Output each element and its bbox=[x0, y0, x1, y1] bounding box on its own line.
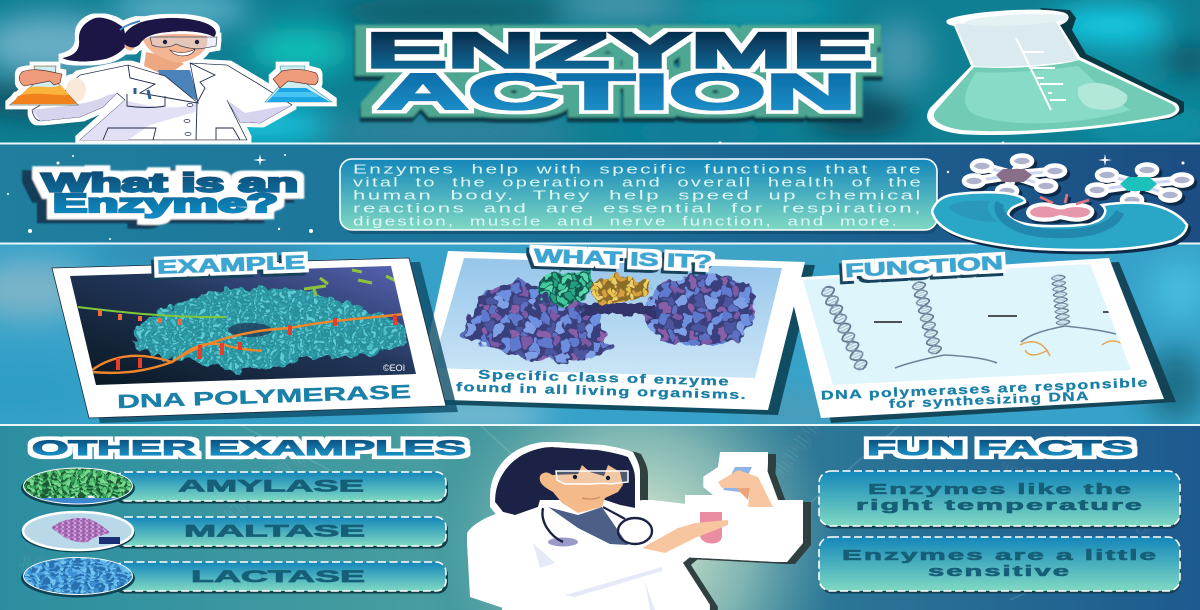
card three shadow bbox=[797, 262, 1176, 423]
panel: example card bbox=[52, 258, 458, 423]
example row: amylase: AMYLASE bbox=[178, 476, 364, 496]
hair bbox=[122, 18, 216, 47]
lower test tube bbox=[700, 512, 722, 544]
sparkles bbox=[7, 142, 1184, 240]
orange helix bbox=[92, 314, 404, 370]
caption: what is it: Specific class of enzyme bbox=[478, 367, 730, 389]
dna polymerase photo bbox=[70, 266, 416, 385]
example row: maltase bbox=[21, 512, 448, 552]
fun fact: sensitive: sensitive bbox=[928, 564, 1071, 580]
coat bbox=[32, 63, 292, 140]
bubble highlight bbox=[1078, 83, 1127, 110]
caption: what is it: found in all living organisms. bbox=[456, 380, 747, 402]
pens bbox=[135, 88, 150, 99]
face bbox=[540, 465, 623, 513]
panel: enzyme definition: Enzymes help with specific functions that are bbox=[353, 162, 923, 176]
flask outline bbox=[927, 10, 1179, 135]
face bbox=[143, 34, 208, 62]
heading: what is an enzyme: What is an bbox=[42, 168, 298, 198]
eyes bbox=[163, 40, 199, 44]
glasses bbox=[556, 471, 628, 484]
caption: function: for synthesizing DNA bbox=[889, 389, 1090, 411]
heading: fun facts: FUN FACTS bbox=[867, 436, 1133, 460]
icon: large flask bbox=[927, 8, 1184, 135]
title: enzyme action: ACTION bbox=[378, 64, 856, 120]
hair bbox=[495, 447, 635, 515]
fun fact: temperature bbox=[819, 471, 1181, 528]
flask shadow bbox=[1040, 8, 1184, 125]
upper hand bbox=[718, 470, 773, 507]
example row: maltase: MALTASE bbox=[184, 522, 365, 540]
title: enzyme action bbox=[366, 22, 873, 120]
palm shading bbox=[736, 488, 750, 500]
fun fact: temperature: right temperature bbox=[856, 498, 1144, 514]
panel: enzyme definition: vital to the operation and overall health of the bbox=[353, 174, 923, 190]
molecule one bbox=[964, 156, 1065, 196]
shirt bbox=[548, 507, 628, 545]
background: top band bbox=[0, 0, 1200, 146]
molecule two bbox=[1087, 164, 1192, 206]
blue flask bbox=[265, 66, 332, 102]
panel: enzyme definition bbox=[340, 159, 939, 234]
smile bbox=[582, 497, 600, 499]
ear bbox=[124, 40, 136, 50]
panel: what is it card bbox=[415, 250, 815, 415]
character: scientist holding flasks bbox=[10, 17, 332, 140]
card one shadow bbox=[62, 262, 458, 423]
panel: enzyme definition: digestion, muscle and nerve function, and more. bbox=[353, 214, 899, 228]
flask rim highlight bbox=[965, 12, 1069, 28]
heading: what is an enzyme bbox=[42, 168, 298, 218]
panel: enzyme definition: human body. They help speed up chemical bbox=[353, 188, 923, 202]
liquid bbox=[934, 60, 1176, 131]
upper test tube bbox=[723, 467, 752, 492]
lower hand bbox=[642, 520, 728, 553]
panel: function card bbox=[787, 258, 1176, 423]
example row: lactase bbox=[15, 550, 448, 600]
blue shirt bbox=[158, 70, 199, 102]
watermark: ©EOI bbox=[383, 363, 405, 373]
green strand bbox=[78, 307, 226, 317]
label: example: EXAMPLE bbox=[157, 252, 305, 278]
example row: lactase: LACTASE bbox=[191, 567, 365, 586]
coat bbox=[472, 457, 798, 610]
stethoscope bbox=[542, 507, 652, 544]
card three body bbox=[787, 258, 1164, 418]
dna replication diagram bbox=[803, 264, 1131, 385]
panel: enzyme definition: reactions and are essential for respiration, bbox=[353, 200, 923, 216]
protein photo bbox=[435, 258, 782, 378]
upper glass bbox=[955, 21, 1078, 67]
headband bbox=[120, 21, 140, 30]
caption: dna polymerase: DNA POLYMERASE bbox=[117, 382, 411, 413]
left hand bbox=[19, 70, 62, 86]
coat buttons bbox=[184, 104, 193, 136]
fun fact: sensitive: Enzymes are a little bbox=[842, 548, 1158, 564]
neck bbox=[144, 52, 184, 76]
character: doctor with test tubes bbox=[472, 447, 798, 610]
heading: other examples: OTHER EXAMPLES bbox=[32, 436, 466, 460]
icon: enzyme and substrates bbox=[932, 156, 1192, 250]
background: definition band bbox=[0, 144, 1200, 244]
free nucleotides bbox=[304, 270, 398, 296]
label: what is it: WHAT IS IT? bbox=[534, 246, 712, 272]
example row: amylase bbox=[21, 468, 448, 507]
eyes bbox=[573, 475, 610, 480]
lapels and pocket bbox=[103, 63, 240, 140]
title: enzyme action: ENZYME bbox=[366, 22, 873, 78]
safety goggles bbox=[150, 37, 217, 49]
chest piece bbox=[548, 538, 578, 546]
card two body bbox=[415, 251, 805, 410]
heading: what is an enzyme: Enzyme? bbox=[53, 188, 278, 218]
fun fact: sensitive bbox=[819, 537, 1181, 594]
caption: what is it bbox=[456, 367, 747, 402]
sleeve shading bbox=[32, 93, 292, 123]
pink substrate bbox=[1028, 194, 1092, 220]
orange flask bbox=[10, 66, 78, 105]
background: lower band bbox=[0, 426, 1200, 610]
background: cards band bbox=[0, 242, 1200, 429]
card two shadow bbox=[425, 256, 815, 415]
coat lower shading bbox=[80, 100, 197, 140]
right hand bbox=[273, 70, 318, 88]
coat shading bbox=[533, 543, 662, 610]
arrows bbox=[874, 312, 1110, 322]
label: function: FUNCTION bbox=[845, 253, 1003, 281]
ponytail bbox=[62, 17, 127, 62]
measuring scale bbox=[1016, 38, 1066, 110]
fun fact: temperature: Enzymes like the bbox=[868, 482, 1133, 498]
sleeve warm highlight bbox=[66, 78, 86, 102]
caption: function bbox=[821, 375, 1149, 411]
inner liquid highlight bbox=[965, 66, 1130, 123]
card one body bbox=[52, 258, 446, 418]
caption: function: DNA polymerases are responsible bbox=[821, 375, 1149, 403]
smile bbox=[170, 49, 195, 56]
enzyme body bbox=[932, 192, 1187, 250]
dividers bbox=[0, 142, 1200, 426]
